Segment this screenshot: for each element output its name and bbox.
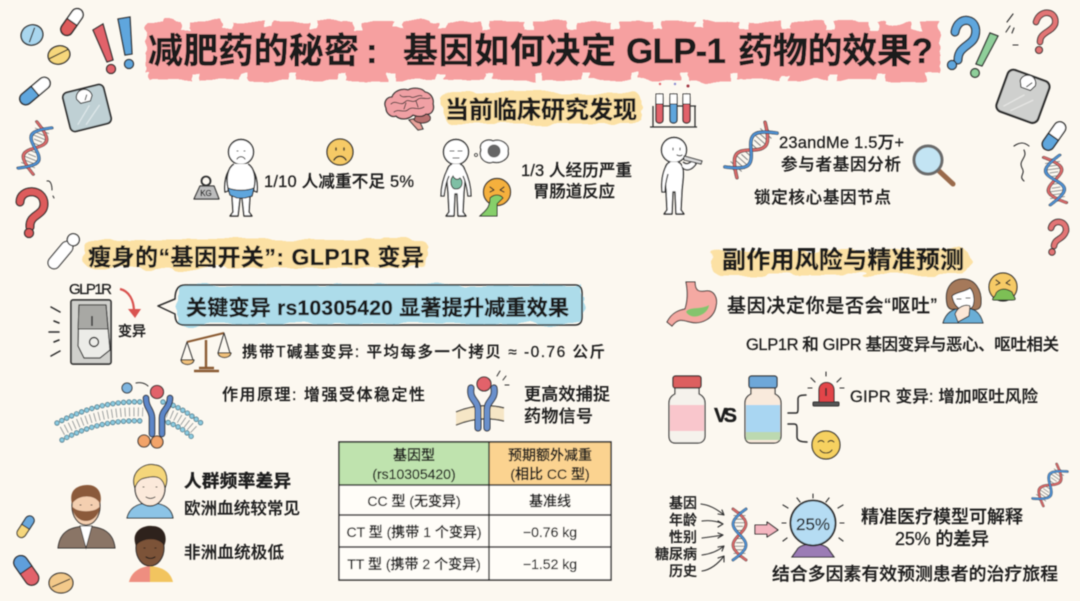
squiggle marks	[1006, 14, 1018, 45]
heading: 副作用风险与精准预测	[722, 247, 964, 274]
decorative left icons: pills, exclamation marks, scale, DNA, question	[17, 6, 133, 238]
factor labels: 糖尿病	[655, 546, 697, 562]
heading: 瘦身的“基因开关”: GLP1R 变异	[88, 244, 424, 270]
header text: (rs10305420)	[372, 466, 456, 482]
factor arrows	[701, 504, 724, 571]
heading: 当前临床研究发现	[445, 97, 637, 124]
factor labels	[655, 495, 697, 579]
row CC: CC 型 (无变异)	[367, 493, 461, 509]
factor labels: 历史	[669, 563, 697, 579]
bracket connector	[788, 395, 807, 442]
arrow: pink block	[755, 522, 778, 537]
heading highlight	[443, 92, 642, 124]
icon: alarm	[808, 372, 844, 406]
text: GIPR: GIPR 变异: 增加呕吐风险	[850, 386, 1038, 406]
title: GLP-1	[626, 32, 726, 71]
figure: man with test swab	[662, 138, 702, 214]
table grid	[339, 442, 611, 580]
icon: sad face	[327, 139, 353, 165]
drug molecule	[122, 383, 148, 393]
icon: yellow blue capsule	[15, 514, 36, 539]
diagram: cell membrane and receptor	[57, 383, 201, 448]
icon: crystal ball 25%	[782, 494, 844, 557]
figure: bearded man	[58, 485, 115, 548]
callout wash	[178, 285, 582, 324]
panel: GLP1R variant	[46, 231, 610, 448]
label: variant: 变异	[118, 323, 146, 339]
icon: red vial	[669, 376, 705, 443]
icon: magnifier	[914, 146, 953, 184]
icon: round blue pill	[18, 22, 46, 48]
stat: 23andMe	[779, 134, 904, 174]
figure: man with GI reaction	[441, 140, 471, 216]
icon: blue capsule	[17, 75, 53, 107]
factor labels: 性别	[669, 529, 697, 545]
icon: brain	[385, 88, 434, 130]
figure: blond man	[127, 464, 173, 518]
text: model explains: 25% 的差异	[895, 529, 989, 549]
icon: rocker switch	[71, 300, 111, 364]
text: capture signal: 更高效捕捉	[524, 385, 610, 404]
table: genotype	[339, 442, 611, 580]
icon: receptor capturing signal	[456, 371, 509, 428]
header text	[372, 447, 592, 482]
row CT	[346, 524, 577, 540]
decorative right icons	[948, 13, 1068, 255]
stat: 23andMe: 23andMe 1.5万+	[779, 134, 904, 152]
text: population frequency: 欧洲血统较常见	[184, 499, 300, 518]
icon: bathroom scale	[62, 84, 112, 132]
title: 减肥药的秘密	[148, 32, 359, 71]
icon: kettlebell KG: KG	[200, 189, 212, 198]
icon: thought cloud	[474, 140, 508, 163]
callout: key variant: 关键变异 rs10305420 显著提升减重效果	[186, 296, 569, 320]
text: capture signal: 药物信号	[524, 407, 593, 426]
header text: (相比 CC 型)	[510, 466, 590, 482]
heading highlight	[712, 250, 970, 275]
panel: side effects and prediction	[655, 247, 1067, 584]
title: :	[366, 32, 378, 71]
panel: current clinical findings	[194, 83, 953, 216]
header text: 基因型	[393, 447, 435, 463]
icon: red question mark small	[1036, 13, 1055, 54]
icon: calm smile	[812, 431, 840, 459]
title: 基因如何决定	[403, 32, 616, 71]
stat: one in three: 1/3 人经历严重	[521, 161, 632, 180]
title	[148, 32, 933, 71]
icon: pin	[46, 231, 82, 271]
icon: green exclamation	[971, 33, 998, 77]
text: vomit genes: 基因决定你是否会“呕吐”	[727, 295, 937, 317]
switch rays	[49, 307, 60, 356]
icon: blue white capsule	[1040, 119, 1068, 153]
icon: vomiting face	[989, 273, 1017, 301]
callout: key variant	[158, 285, 582, 325]
title highlight	[146, 28, 940, 74]
icon: kettlebell KG	[194, 176, 219, 199]
stat: one in three	[521, 161, 632, 201]
figure: dark skinned man	[129, 526, 173, 582]
text: capture signal	[524, 385, 610, 426]
figure: overweight man	[225, 140, 257, 216]
icon: red question mark lower	[1049, 222, 1066, 255]
icon: red question mark	[20, 192, 44, 238]
stat: one in ten: 1/10 人减重不足 5%	[264, 172, 414, 191]
text: population frequency	[184, 471, 300, 562]
squiggle marks	[1014, 143, 1029, 181]
panel: population frequency	[11, 464, 300, 593]
stat: 23andMe: 参与者基因分析	[781, 155, 901, 174]
row CC	[367, 493, 571, 509]
receptor	[138, 386, 170, 448]
text: T allele effect: 携带T碱基变异: 平均每多一个拷贝 ≈ -0.76 公斤	[242, 342, 605, 361]
icon: red exclamation	[93, 24, 116, 74]
icon: vomiting face	[480, 178, 510, 216]
text: model explains	[861, 507, 1023, 549]
text: population frequency: 非洲血统极低	[184, 543, 284, 562]
icon: orange pill	[49, 573, 73, 593]
row TT	[347, 556, 577, 572]
icon: DNA left	[18, 122, 52, 174]
row TT: −1.52 kg	[523, 556, 577, 572]
membrane	[57, 402, 201, 440]
factor labels: 年龄	[669, 512, 697, 528]
icon: gray scale	[995, 68, 1051, 125]
label: GLP1R: GLP1R	[69, 281, 112, 298]
header cell left	[339, 442, 489, 485]
header cell right	[489, 442, 611, 485]
text: population frequency: 人群频率差异	[184, 471, 291, 491]
row backgrounds	[339, 485, 611, 580]
icon: blue exclamation	[118, 17, 134, 68]
icon: DNA corner	[1033, 464, 1067, 506]
row TT: TT 型 (携带 2 个变异)	[347, 556, 481, 572]
icon: test tubes	[650, 83, 697, 127]
arrow: down to variant	[120, 289, 141, 318]
icon: blue vial	[745, 376, 781, 443]
icon: crystal ball 25%: 25%	[796, 515, 830, 534]
header text: 预期额外减重	[508, 447, 592, 463]
text: mechanism: 作用原理: 增强受体稳定性	[222, 385, 425, 404]
icon: DNA right	[1044, 155, 1066, 205]
icon: round yellow pill	[46, 43, 72, 67]
text: model explains: 精准医疗模型可解释	[861, 507, 1023, 527]
icon: balance scale	[181, 333, 231, 371]
factor labels: 基因	[669, 495, 697, 511]
icon: DNA	[725, 122, 777, 178]
text: GLP1R GIPR nausea: GLP1R 和 GIPR 基因变异与恶心、呕吐相关	[746, 334, 1059, 354]
heading highlight	[84, 240, 428, 268]
text: lock core nodes: 锁定核心基因节点	[754, 187, 891, 207]
row CT: −0.76 kg	[523, 524, 577, 540]
row CT: CT 型 (携带 1 个变异)	[346, 524, 482, 540]
text: VS: VS	[714, 405, 737, 427]
icon: red capsule	[58, 6, 86, 38]
stat: one in three: 胃肠道反应	[533, 182, 615, 201]
text: conclusion: 结合多因素有效预测患者的治疗旅程	[772, 564, 1058, 584]
title: 药物的效果?	[738, 32, 933, 71]
icon: blue red capsule	[11, 553, 41, 588]
icon: stomach	[667, 282, 717, 326]
small marks near question	[47, 181, 54, 198]
figure: nauseous woman	[943, 279, 983, 323]
icon: blue question mark	[948, 20, 976, 70]
row CC: 基准线	[529, 493, 571, 509]
icon: DNA vertical	[733, 509, 746, 560]
